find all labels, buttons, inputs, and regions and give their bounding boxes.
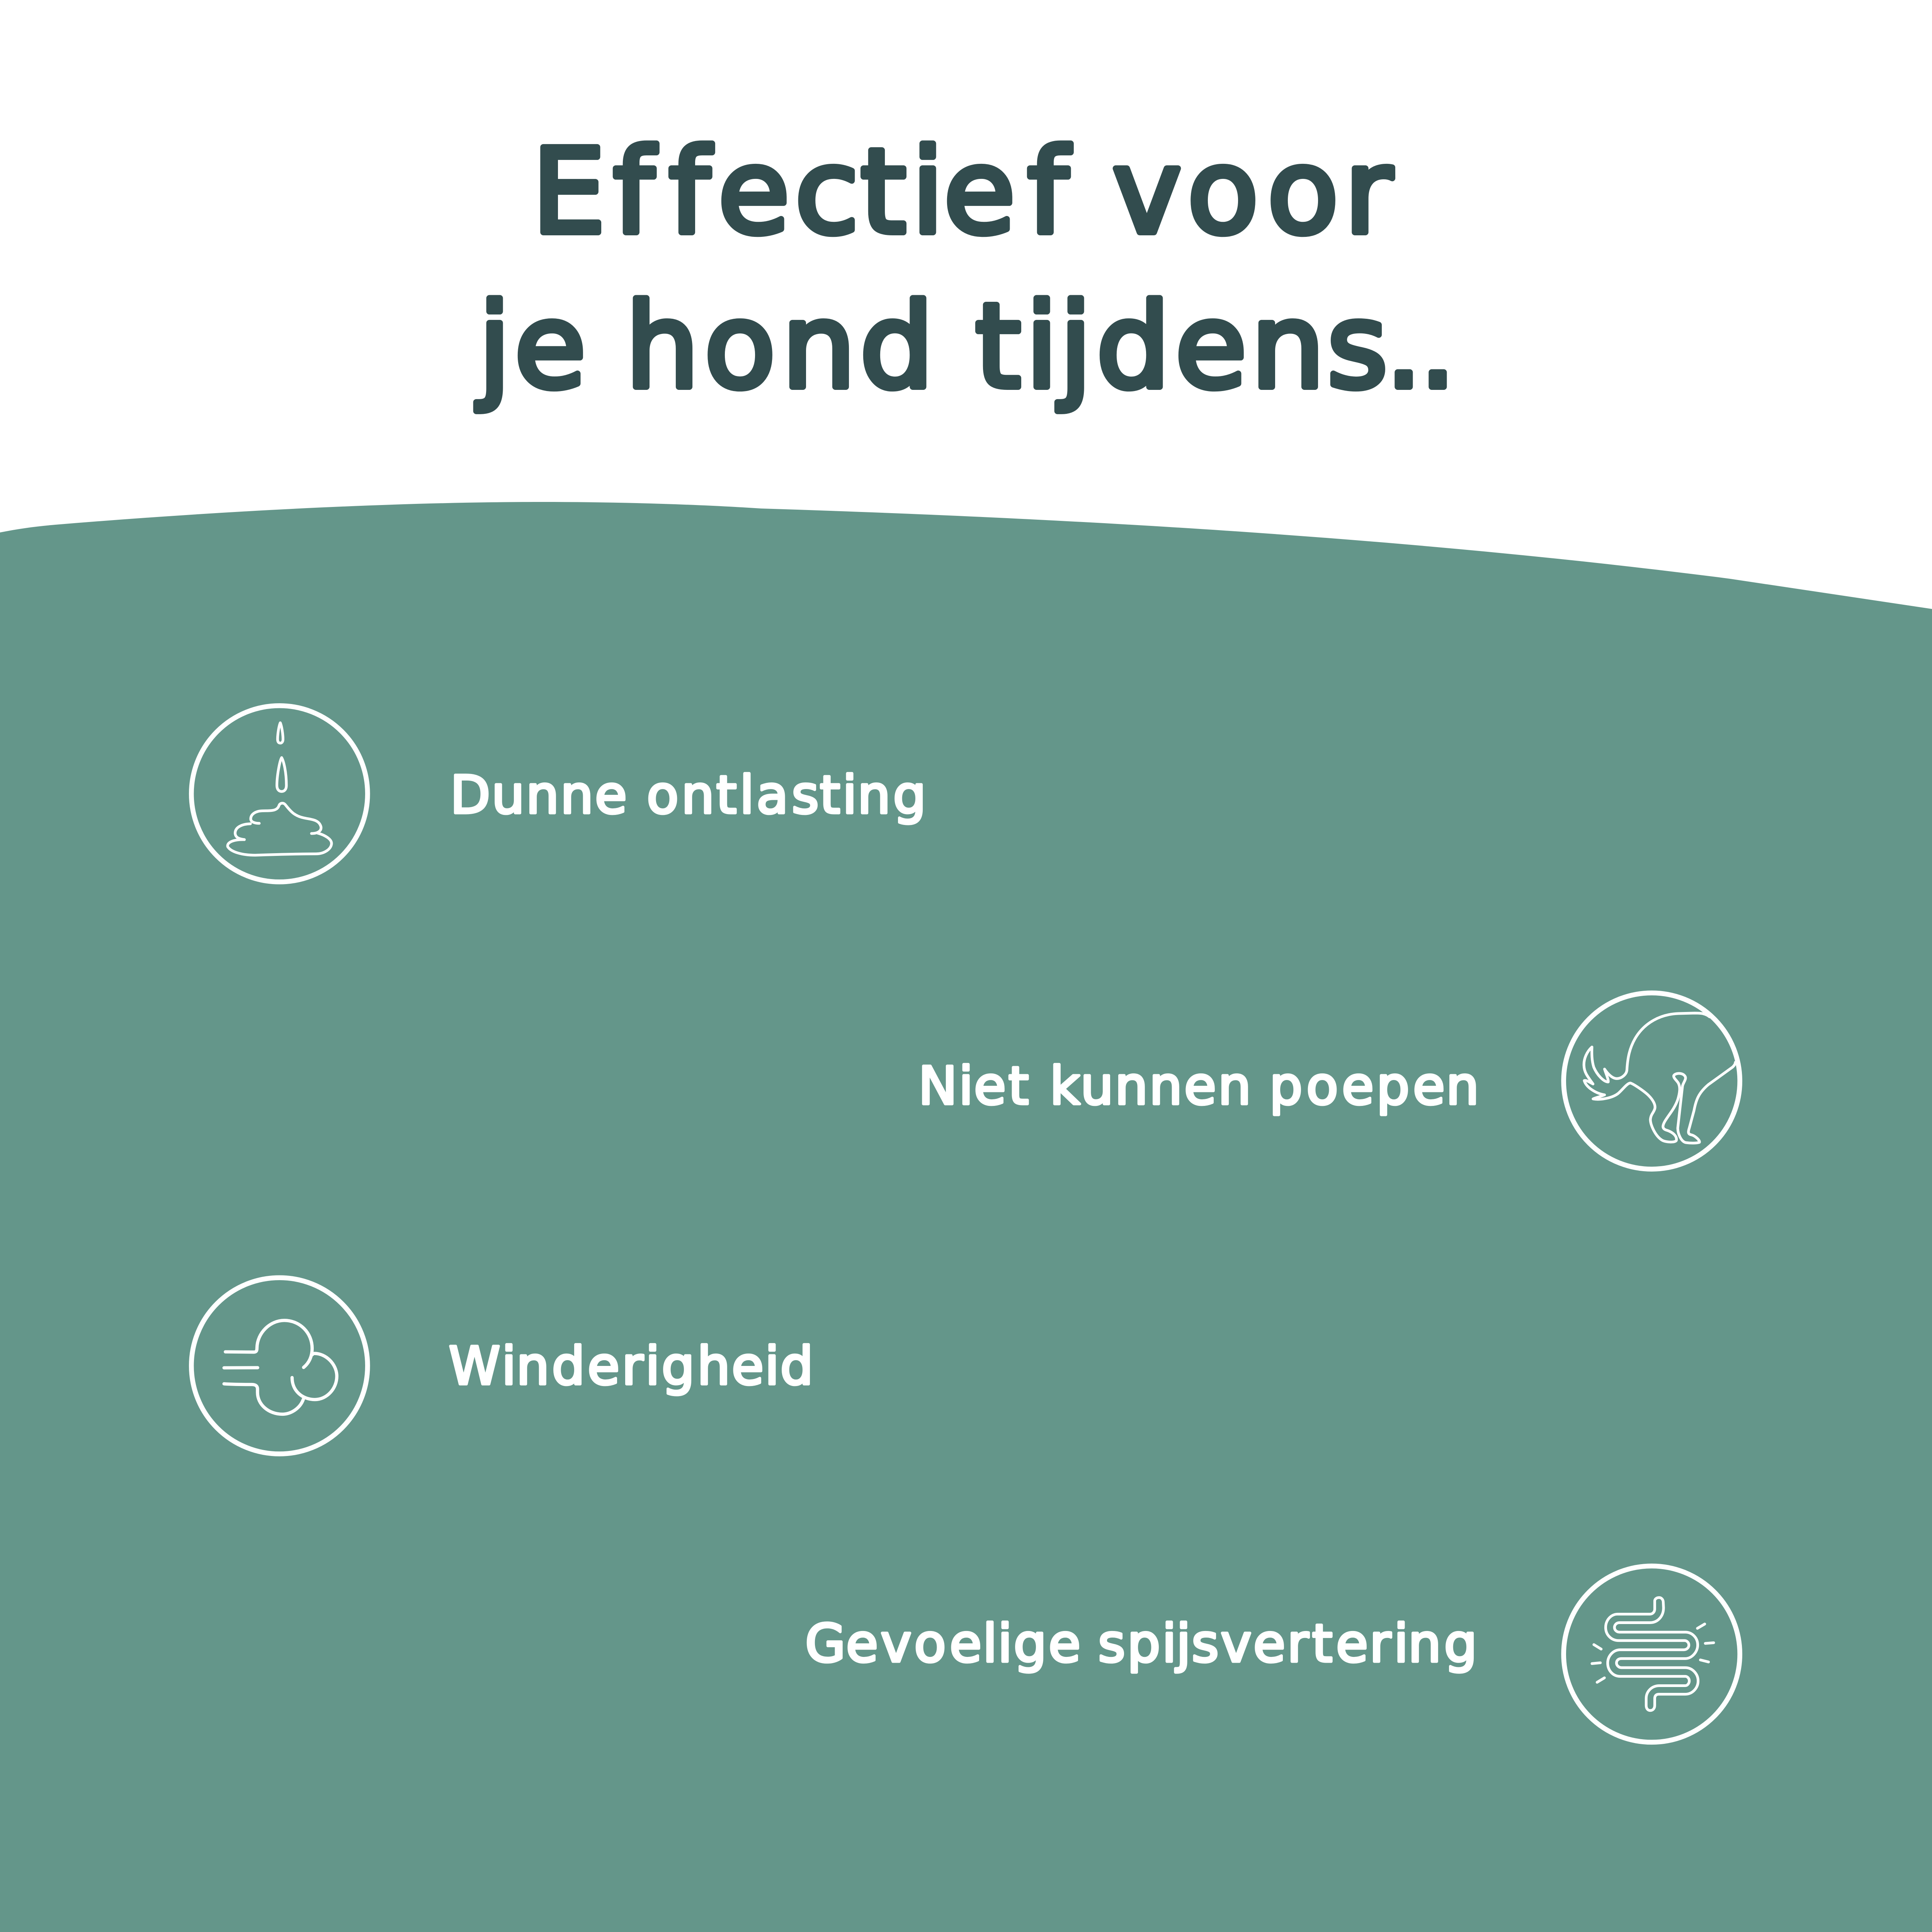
title: Effectief voor — [532, 124, 1393, 260]
label: Winderigheid — [449, 1336, 813, 1396]
green wave background panel — [0, 502, 1932, 1932]
title: je hond tijdens.. — [475, 279, 1456, 415]
item: Gevoelige spijsvertering — [805, 1566, 1740, 1742]
icon: squatting dog — [1564, 993, 1740, 1169]
title — [475, 124, 1456, 415]
item: Dunne ontlasting — [191, 706, 926, 882]
icon: gas cloud — [191, 1278, 367, 1454]
label: Gevoelige spijsvertering — [805, 1613, 1477, 1674]
label: Niet kunnen poepen — [918, 1056, 1479, 1116]
item: Winderigheid — [191, 1278, 813, 1454]
item: Niet kunnen poepen — [918, 993, 1740, 1169]
icon: intestines — [1564, 1566, 1740, 1742]
label: Dunne ontlasting — [450, 765, 926, 825]
icon: loose stool with drops — [191, 706, 367, 882]
